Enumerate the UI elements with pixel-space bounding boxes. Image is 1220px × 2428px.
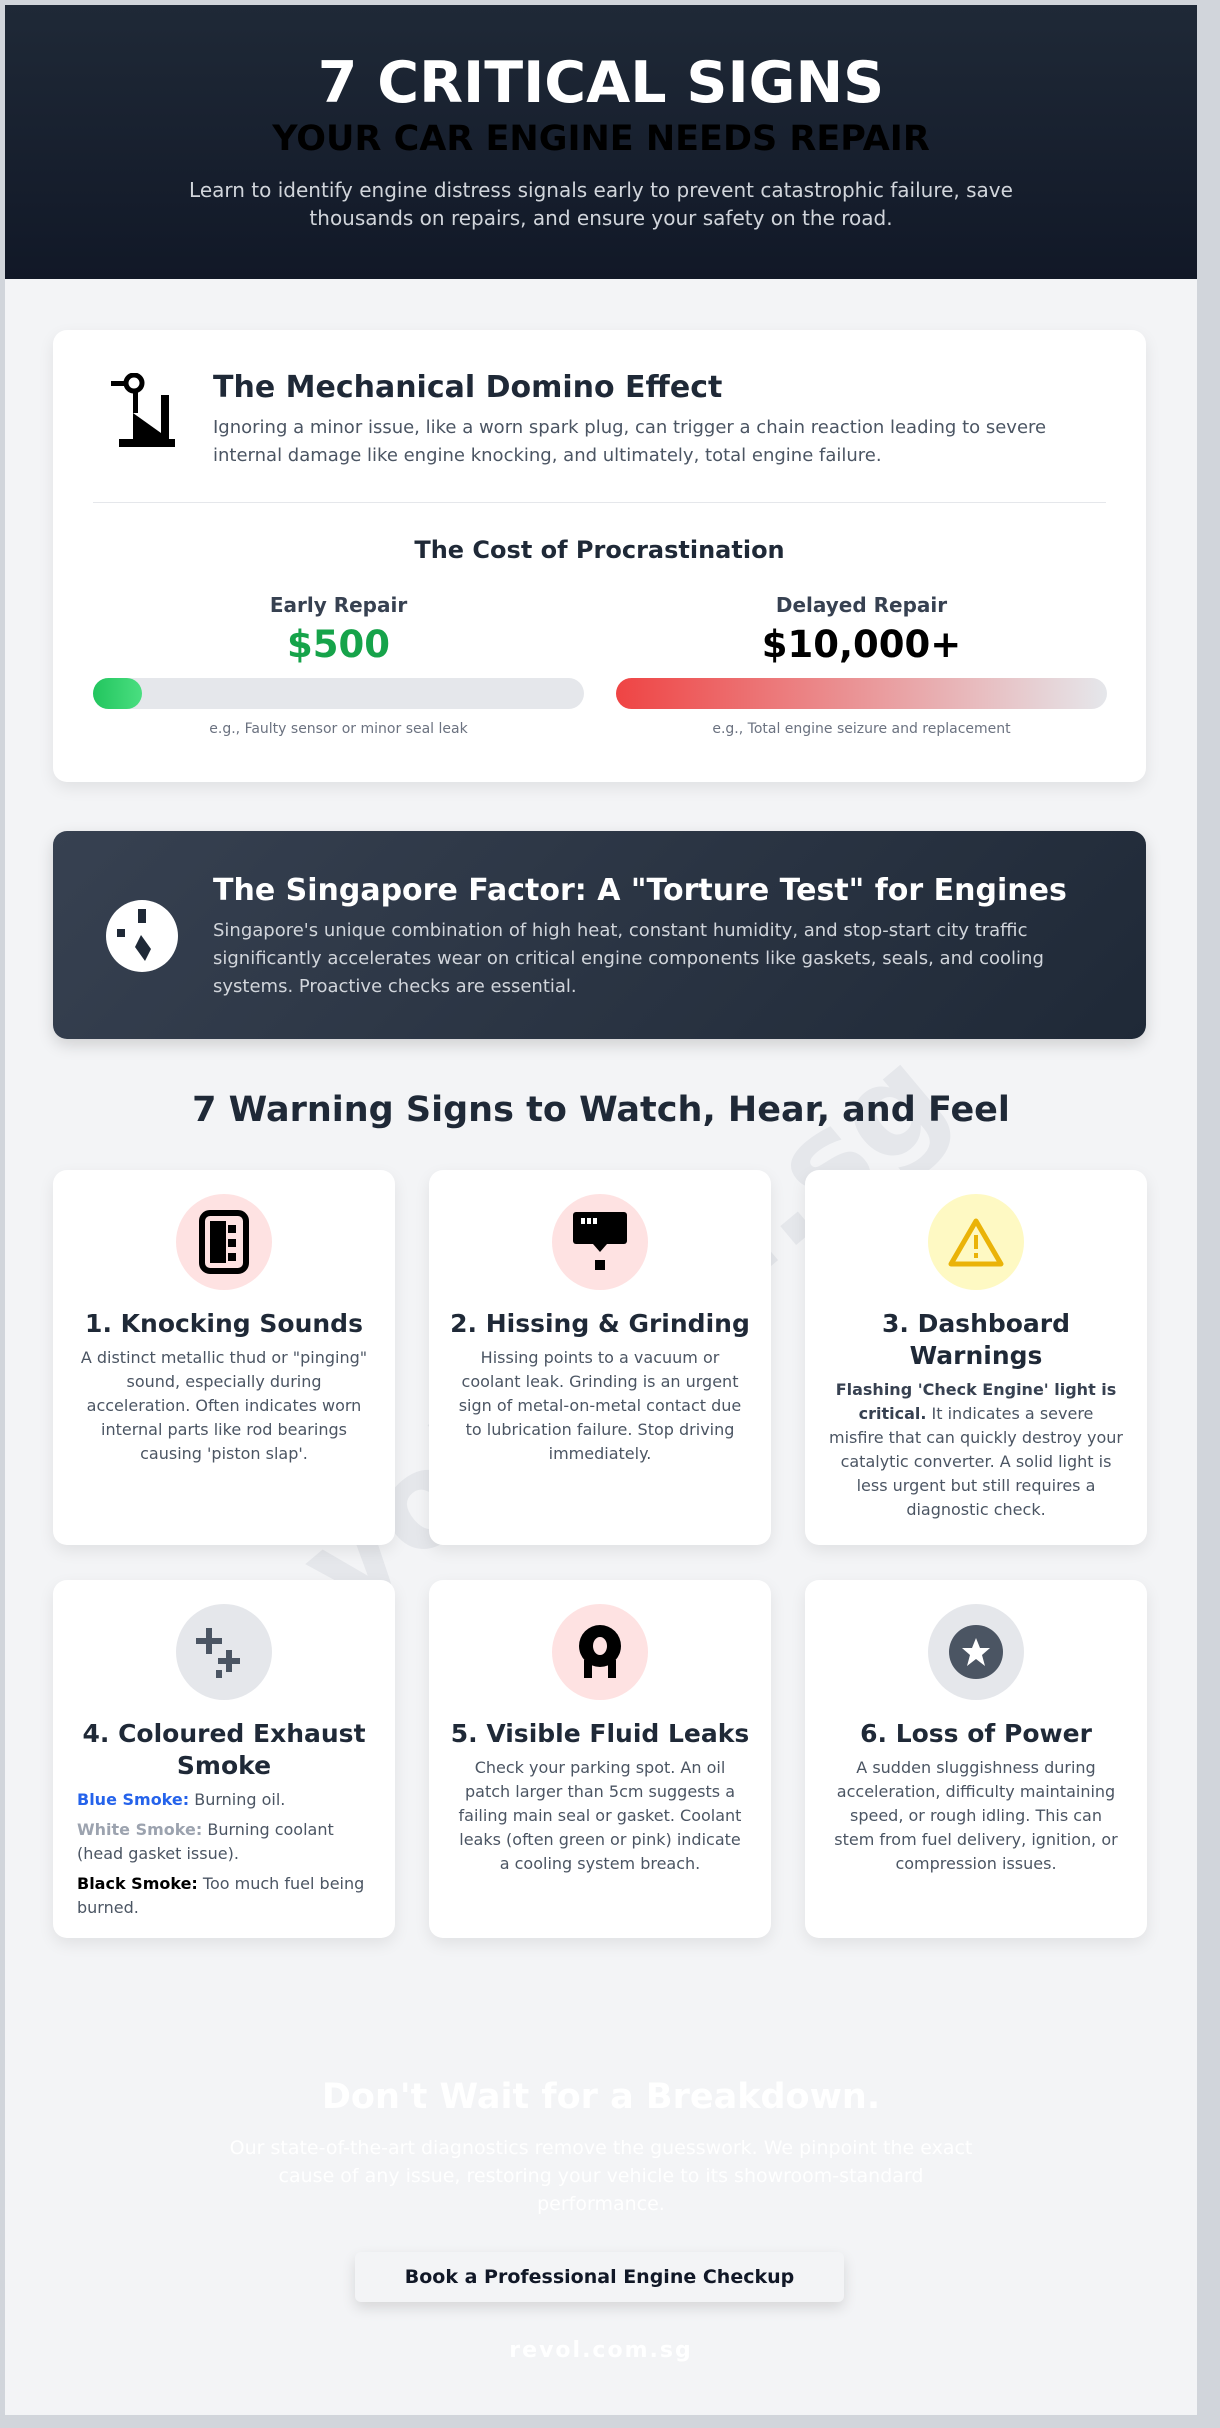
early repair: e.g., Faulty sensor or minor seal leak: [209, 721, 468, 737]
card 1: 1. Knocking Sounds: [85, 1309, 363, 1338]
heading: The Mechanical Domino Effect: [213, 370, 722, 405]
intro text: Learn to identify engine distress signals early to prevent catastrophic failure, save thousands on repairs, and ensure your safety on the road.: [189, 178, 1013, 230]
card 6: [805, 1580, 1147, 1938]
delayed repair: e.g., Total engine seizure and replacement: [712, 721, 1011, 737]
bar: early: [93, 678, 584, 709]
icon: knock: [176, 1194, 272, 1290]
text: Singapore's unique combination of high heat, constant humidity, and stop-start city traffic significantly accelerates wear on critical engine components like gaskets, seals, and cooling systems. Proactive checks are essential.: [213, 920, 1044, 997]
button: Book a Professional Engine Checkup: [405, 2266, 794, 2288]
card 5: [429, 1580, 771, 1938]
icon: domino: [111, 373, 175, 447]
cta heading: Don't Wait for a Breakdown.: [322, 2077, 880, 2117]
heading: cost: The Cost of Procrastination: [414, 536, 785, 564]
card 3: Flashing 'Check Engine' light is critical. It indicates a severe misfire that can quickly destroy your catalytic converter. A solid light is less urgent but still requires a diagnostic check.: [829, 1380, 1123, 1519]
card 3: [805, 1170, 1147, 1545]
early repair: [93, 593, 584, 737]
icon: hiss: [552, 1194, 648, 1290]
icon: smoke: [176, 1604, 272, 1700]
panel: domino effect: [53, 330, 1146, 782]
delayed repair: [616, 593, 1107, 737]
card 1: A distinct metallic thud or "pinging" sound, especially during acceleration. Often indicates worn internal parts like rod bearings causing 'piston slap'.: [81, 1348, 367, 1463]
card 2: [429, 1170, 771, 1545]
icon: power: [928, 1604, 1024, 1700]
card 2: Hissing points to a vacuum or coolant leak. Grinding is an urgent sign of metal-on-metal contact due to lubrication failure. Stop driving immediately.: [459, 1348, 741, 1463]
delayed repair: Delayed Repair: [776, 593, 947, 617]
heading: The Singapore Factor: A "Torture Test" for Engines: [213, 873, 1067, 908]
card 5: 5. Visible Fluid Leaks: [451, 1719, 749, 1748]
card 4: Blue Smoke: Burning oil.: [77, 1790, 285, 1809]
early repair: $500: [287, 623, 390, 666]
icon: leak: [552, 1604, 648, 1700]
card 3: 3. Dashboard: [882, 1309, 1070, 1338]
cta text: Our state-of-the-art diagnostics remove the guesswork. We pinpoint the exact cause of any issue, restoring your vehicle to its showroom-standard performance.: [230, 2137, 972, 2215]
card 1: [53, 1170, 395, 1545]
card 4: Black Smoke: Too much fuel being burned.: [77, 1874, 364, 1917]
card 4: 4. Coloured Exhaust Smoke: [82, 1719, 366, 1780]
text: Ignoring a minor issue, like a worn spark plug, can trigger a chain reaction leading to severe internal damage like engine knocking, and ultimately, total engine failure.: [213, 417, 1046, 466]
bar: delayed: [616, 678, 1107, 709]
delayed repair: $10,000+: [762, 623, 961, 666]
card 3: Warnings: [910, 1341, 1042, 1370]
title: 7 CRITICAL SIGNS: [318, 50, 884, 116]
card 2: 2. Hissing & Grinding: [450, 1309, 750, 1338]
card 6: 6. Loss of Power: [860, 1719, 1092, 1748]
subtitle: YOUR CAR ENGINE NEEDS REPAIR: [272, 119, 930, 159]
button: [355, 2252, 844, 2302]
early repair: Early Repair: [270, 593, 407, 617]
card 5: Check your parking spot. An oil patch larger than 5cm suggests a failing main seal or gasket. Coolant leaks (often green or pink) indicate a cooling system breach.: [459, 1758, 741, 1873]
card 6: A sudden sluggishness during acceleration, difficulty maintaining speed, or rough idling. This can stem from fuel delivery, ignition, or compression issues.: [834, 1758, 1118, 1873]
section heading: 7 Warning Signs to Watch, Hear, and Feel: [192, 1090, 1010, 1130]
panel: singapore factor: [53, 831, 1146, 1039]
footer: revol.com.sg: [509, 2338, 693, 2363]
icon: gauge: [106, 900, 178, 972]
icon: warning: [928, 1194, 1024, 1290]
watermark: revol.com.sg: [155, 1020, 974, 1741]
card 4: White Smoke: Burning coolant (head gasket issue).: [77, 1820, 334, 1863]
card 4: [53, 1580, 395, 1938]
header: [5, 5, 1197, 279]
